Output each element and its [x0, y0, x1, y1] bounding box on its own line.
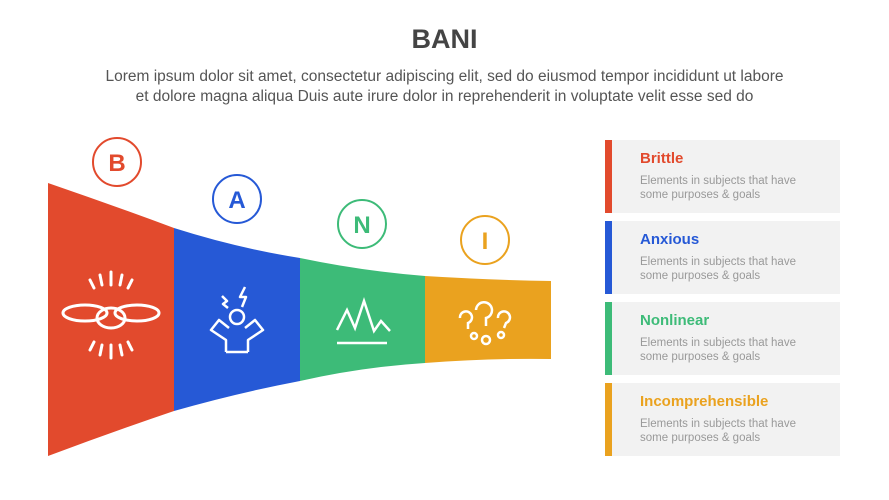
subtitle: et dolore magna aliqua Duis aute irure dolor in reprehenderit in voluptate velit esse sed do	[136, 88, 753, 105]
circle: I	[461, 216, 509, 264]
card: Incomprehensible: Elements in subjects that have	[640, 418, 796, 430]
card: Incomprehensible	[605, 383, 840, 456]
card: Nonlinear: some purposes & goals	[640, 351, 760, 363]
circle: A	[213, 175, 261, 223]
card: Anxious: Anxious	[640, 231, 699, 248]
card: Nonlinear: Nonlinear	[640, 312, 709, 329]
card: Nonlinear	[605, 302, 840, 375]
icon: stressed person	[211, 287, 263, 352]
card: Anxious	[605, 221, 840, 294]
segment: anxious	[174, 228, 300, 411]
card: Nonlinear: Elements in subjects that have	[640, 337, 796, 349]
card: Anxious: Elements in subjects that have	[640, 256, 796, 268]
card: Incomprehensible: Incomprehensible	[640, 393, 768, 410]
card: Anxious: some purposes & goals	[640, 270, 760, 282]
circle: N	[338, 200, 386, 248]
card: Brittle: some purposes & goals	[640, 189, 760, 201]
card: Incomprehensible: some purposes & goals	[640, 432, 760, 444]
segment: incomprehensible	[425, 276, 551, 363]
icon: line chart	[337, 301, 390, 343]
icon: question marks	[460, 302, 510, 344]
circle: B: B	[108, 150, 126, 177]
circle: I: I	[482, 228, 488, 255]
segment: brittle	[48, 183, 174, 456]
circle: A: A	[228, 187, 246, 214]
card: Brittle	[605, 140, 840, 213]
card: Brittle: Brittle	[640, 150, 683, 167]
circle: N: N	[353, 212, 371, 239]
card: Brittle: Elements in subjects that have	[640, 175, 796, 187]
circle: B	[93, 138, 141, 186]
segment: nonlinear	[300, 258, 425, 381]
subtitle: Lorem ipsum dolor sit amet, consectetur adipiscing elit, sed do eiusmod tempor incididunt ut labore	[105, 68, 784, 85]
subtitle	[105, 68, 784, 105]
title: BANI	[412, 24, 478, 54]
icon: broken chain	[63, 272, 159, 358]
